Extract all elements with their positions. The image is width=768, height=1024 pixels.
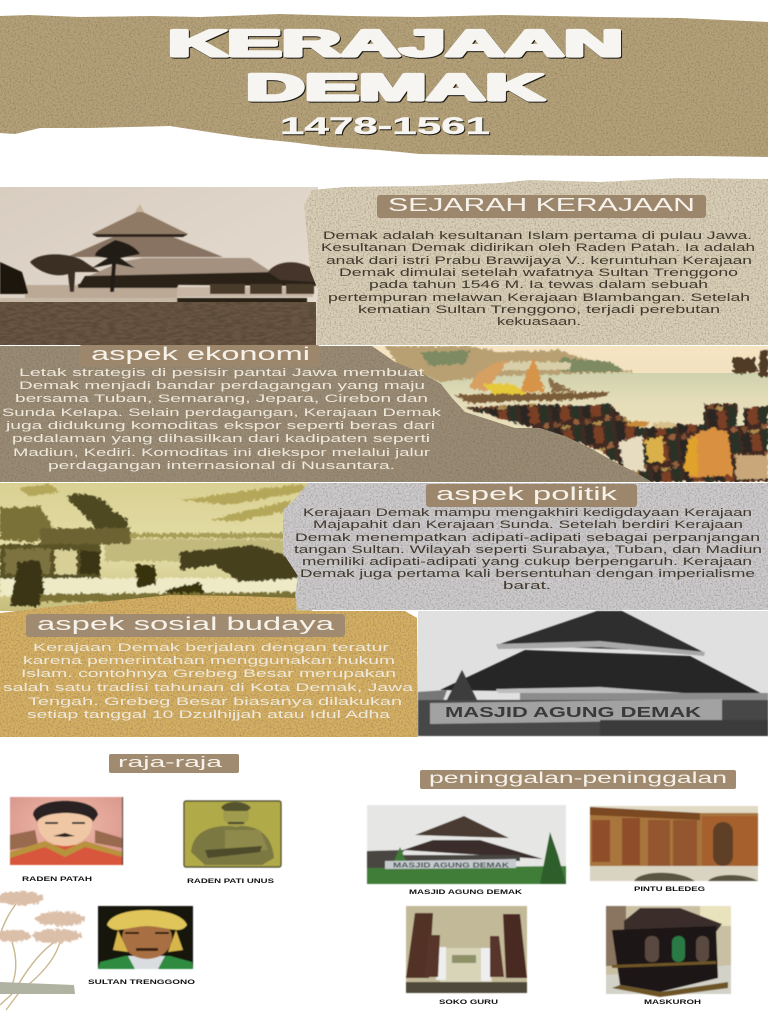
body text: pedalaman yang dihasilkan dari kadipaten seperti: [12, 433, 430, 445]
panel: aspek ekonomi: [0, 343, 768, 482]
body text: anak dari istri Prabu Brawijaya V.. keruntuhan Kerajaan: [326, 255, 752, 267]
caption: Raden Pati Unus: RADEN PATI UNUS: [187, 879, 274, 885]
body text: Madiun, Kediri. Komoditas ini diekspor melalui jalur: [13, 447, 431, 459]
painting: harbour trade: [372, 346, 768, 482]
body text: [3, 642, 413, 721]
torn paper band: [0, 14, 768, 157]
caption: Sultan Trenggono: SULTAN TRENGGONO: [88, 980, 196, 986]
panel: aspek politik: [0, 483, 768, 611]
paper background: [283, 483, 768, 610]
heading pill: [26, 613, 345, 637]
body text: [321, 230, 755, 328]
paper background: [304, 178, 768, 345]
heading pill: [109, 754, 239, 773]
caption: Pintu Bledeg: PINTU BLEDEG: [634, 887, 706, 893]
body text: pertempuran melawan Kerajaan Blambangan. Setelah: [328, 292, 750, 304]
caption: Raden Patah: RADEN PATAH: [22, 877, 92, 883]
caption: Maskuroh: MASKUROH: [644, 1000, 701, 1006]
body text: salah satu tradisi tahunan di Kota Demak, Jawa: [3, 682, 413, 694]
body text: [2, 367, 442, 472]
heading pill: [79, 343, 320, 367]
title banner: [0, 14, 768, 157]
body text: Majapahit dan Kerajaan Sunda. Setelah berdiri Kerajaan: [313, 519, 743, 531]
body text: kekuasaan.: [497, 316, 581, 328]
photo: Masjid Agung Demak, greyscale: [418, 611, 768, 736]
heading pill: [426, 483, 637, 507]
title: Kerajaan Demak: KERAJAAN: [168, 23, 623, 64]
body text: memiliki adipati-adipati yang cukup berpengaruh. Kerajaan: [302, 556, 752, 568]
body text: bersama Tuban, Semarang, Jepara, Cirebon dan: [15, 393, 428, 405]
body text: Kerajaan Demak mampu mengakhiri kedigdayaan Kerajaan: [303, 507, 752, 519]
photo: Masjid Agung Demak: [367, 805, 566, 884]
painting: battle scene: [0, 483, 312, 611]
torn paper background: [0, 346, 652, 482]
body text: Kerajaan Demak berjalan dengan teratur: [33, 642, 390, 654]
body text: Islam. contohnya Grebeg Besar merupakan: [21, 668, 396, 680]
body text: Demak adalah kesultanan Islam pertama di pulau Jawa.: [323, 230, 752, 242]
paper background: [0, 595, 418, 737]
body text: perdagangan internasional di Nusantara.: [48, 460, 395, 472]
caption: Soko Guru: SOKO GURU: [439, 1000, 498, 1006]
body text: kematian Sultan Trenggono, terjadi perebutan: [358, 304, 720, 316]
heading pill: aspek ekonomi: [91, 343, 310, 364]
photo: Maskuroh: [606, 906, 731, 997]
photo: Soko Guru: [406, 906, 527, 993]
body text: Demak menjadi bandar perdagangan yang maju: [19, 380, 425, 392]
body text: Kesultanan Demak didirikan oleh Raden Patah. Ia adalah: [321, 242, 755, 254]
body text: Sunda Kelapa. Selain perdagangan, Kerajaan Demak: [2, 407, 442, 419]
photo: Masjid Agung Demak, greyscale: MASJID AGUNG DEMAK: [445, 704, 701, 721]
body text: karena pemerintahan menggunakan hukum: [23, 655, 395, 667]
photo: Pintu Bledeg: [590, 806, 758, 881]
panel: sejarah kerajaan: [0, 178, 768, 345]
panel: peninggalan-peninggalan: [367, 770, 758, 1006]
heading pill: aspek politik: [436, 483, 618, 504]
body text: pada tahun 1546 M. Ia tewas dalam sebuah: [369, 279, 708, 291]
body text: Letak strategis di pesisir pantai Jawa membuat: [19, 367, 424, 379]
body text: setiap tanggal 10 Dzulhijjah atau Idul Adha: [27, 709, 390, 721]
portrait: Raden Patah: [10, 797, 123, 865]
panel: raja-raja: [0, 754, 281, 1010]
heading pill: peninggalan-peninggalan: [429, 770, 727, 787]
title: Kerajaan Demak: [168, 23, 623, 108]
panel: aspek sosial budaya: [0, 595, 768, 737]
photo: Masjid Agung Demak: MASJID AGUNG DEMAK: [393, 860, 510, 870]
heading pill: SEJARAH KERAJAAN: [388, 195, 695, 215]
body text: juga didukung komoditas ekspor seperti beras dari: [4, 420, 435, 432]
body text: Tengah. Grebeg Besar biasanya dilakukan: [28, 696, 402, 708]
heading pill: raja-raja: [118, 754, 223, 771]
heading pill: [420, 770, 736, 789]
body text: Demak menempatkan adipati-adipati sebagai perpanjangan: [295, 532, 760, 544]
body text: Demak dimulai setelah wafatnya Sultan Trenggono: [339, 267, 738, 279]
decoration: dried flowers: [0, 891, 85, 1010]
heading pill: [377, 195, 706, 218]
body text: Demak juga pertama kali bersentuhan dengan imperialisme: [300, 568, 755, 580]
portrait: Sultan Trenggono: [98, 906, 193, 969]
years: 1478-1561: [280, 113, 490, 140]
body text: tangan Sultan. Wilayah seperti Surabaya, Tuban, dan Madiun: [294, 544, 762, 556]
title: Kerajaan Demak: DEMAK: [246, 67, 545, 108]
caption: Masjid Agung Demak: MASJID AGUNG DEMAK: [409, 890, 523, 896]
portrait: Raden Pati Unus: [184, 801, 281, 867]
heading pill: aspek sosial budaya: [37, 613, 335, 634]
photo: old mosque: [0, 187, 318, 345]
body text: barat.: [503, 580, 551, 592]
body text: [294, 507, 762, 592]
